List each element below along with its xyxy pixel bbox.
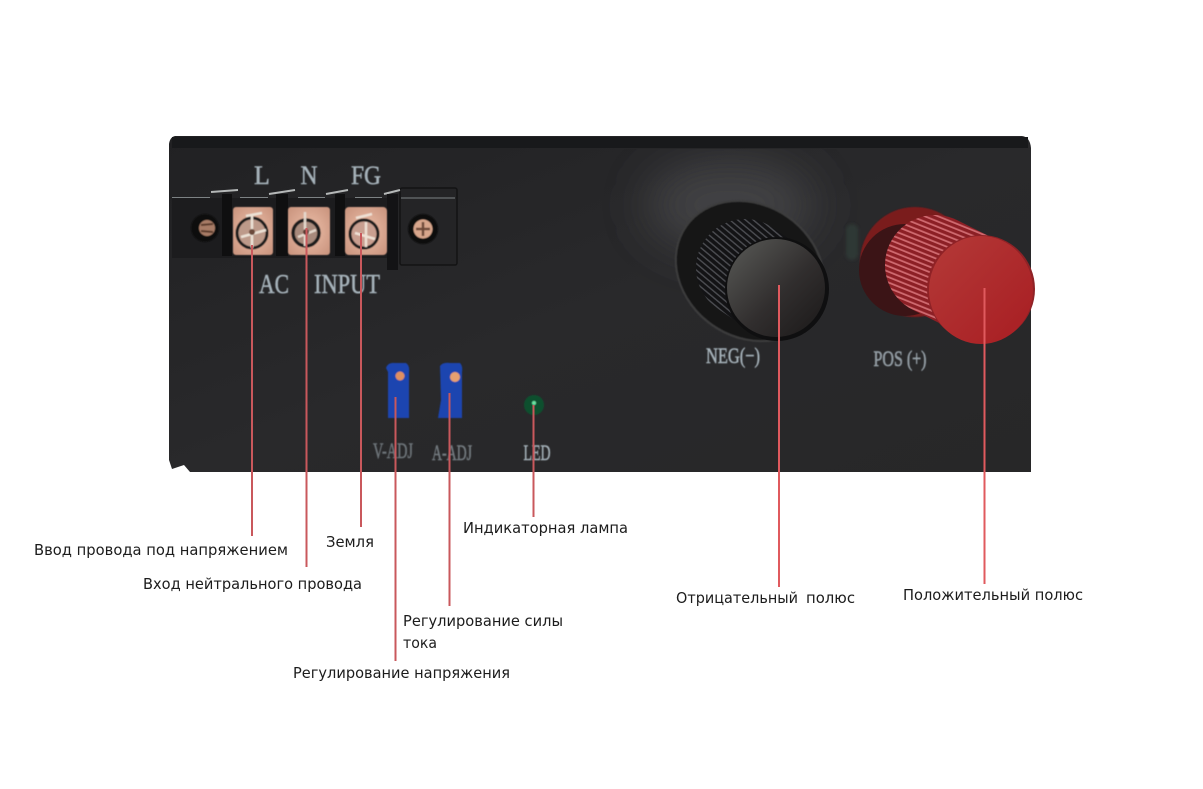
terminal FG — [345, 207, 387, 255]
screw: chassis right — [408, 214, 438, 244]
voltage trimmer — [386, 363, 409, 418]
silkscreen labels: AC terminals: FG — [351, 161, 381, 190]
silkscreen labels: AC terminals — [254, 161, 381, 299]
label: ground: Земля — [326, 533, 374, 551]
label: indicator lamp: Индикаторная лампа — [463, 519, 628, 537]
leader line: N — [306, 228, 308, 567]
silkscreen label: NEG: NEG(−) — [706, 343, 760, 368]
silkscreen labels: adjustments: V-ADJ — [373, 438, 413, 463]
label: voltage adjustment: Регулирование напряжения — [293, 664, 510, 682]
label: positive pole: Положительный полюс — [903, 586, 1083, 604]
leader line: voltage — [394, 397, 396, 661]
leader line: negative — [778, 285, 780, 587]
label: live wire input: Ввод провода под напряжением — [34, 541, 288, 559]
terminal block — [172, 188, 457, 270]
leader line: L — [251, 245, 253, 536]
silkscreen labels: AC terminals: AC — [259, 269, 289, 299]
label: negative pole: полюс — [806, 589, 855, 607]
label: current adjustment — [403, 612, 563, 652]
leader line: positive — [984, 288, 986, 584]
negative terminal knob — [648, 172, 852, 370]
screw: chassis left — [191, 214, 219, 242]
current trimmer — [438, 363, 462, 418]
indicator LED — [524, 395, 544, 415]
leader line: FG — [360, 233, 362, 527]
silkscreen label: POS: POS (+) — [874, 346, 926, 371]
label: current adjustment: тока — [403, 634, 437, 652]
terminal L — [233, 207, 273, 255]
leader line: LED — [532, 405, 534, 517]
device panel — [169, 136, 1035, 472]
silkscreen labels: AC terminals: INPUT — [314, 269, 380, 299]
silkscreen labels: AC terminals: L — [254, 161, 270, 190]
label: neutral wire input: Вход нейтрального провода — [143, 575, 362, 593]
silkscreen labels: adjustments: A-ADJ — [432, 440, 472, 465]
silkscreen labels: adjustments — [373, 438, 550, 465]
silkscreen labels: AC terminals: N — [300, 161, 318, 190]
positive terminal knob — [846, 207, 1035, 344]
silkscreen labels: adjustments: LED — [524, 440, 550, 465]
label: negative pole: Отрицательный — [676, 589, 798, 607]
leader line: current — [448, 393, 450, 606]
label: current adjustment: Регулирование силы — [403, 612, 563, 630]
terminal N — [288, 207, 330, 255]
